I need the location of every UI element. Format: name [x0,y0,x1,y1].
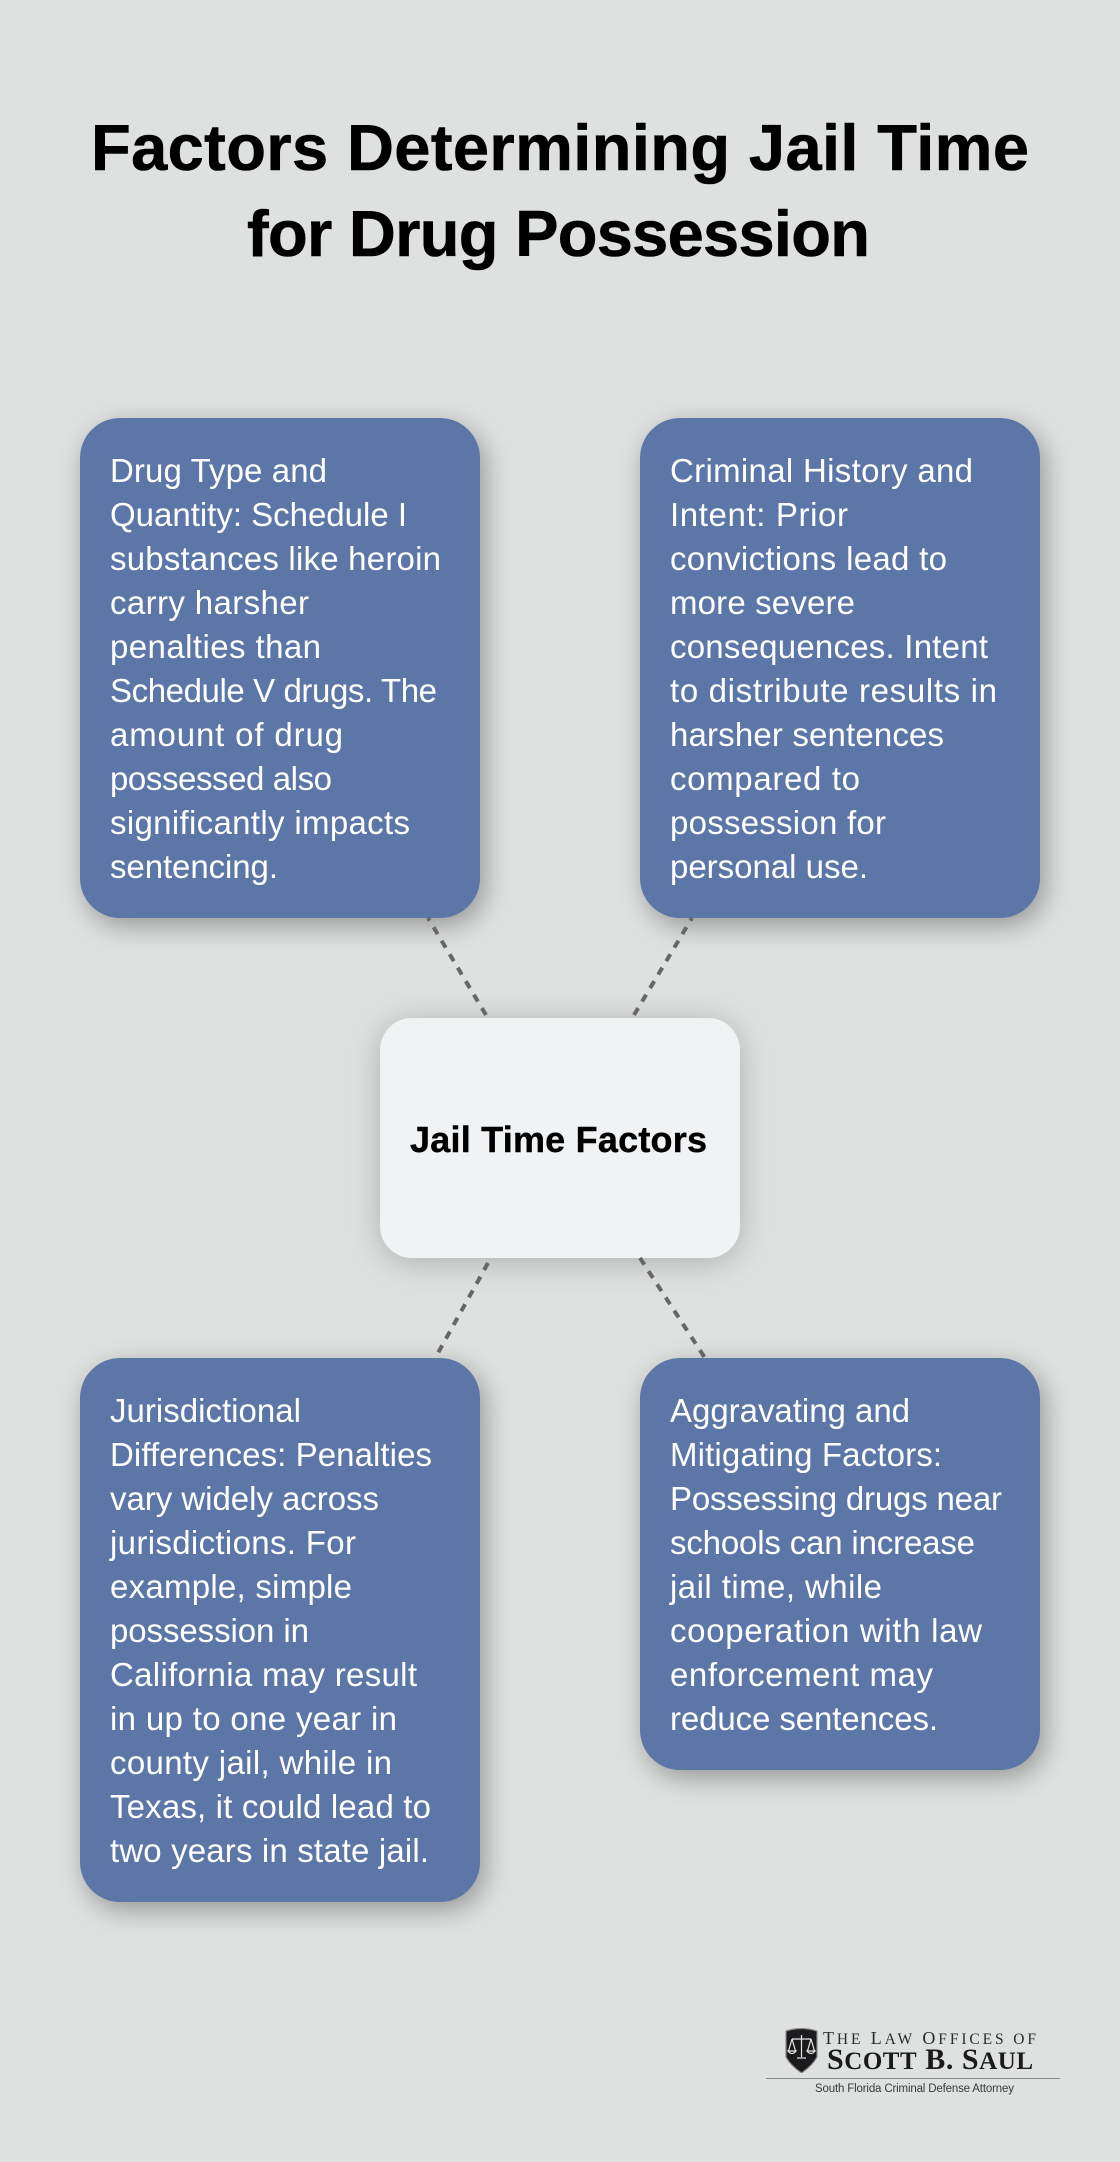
panel: jurisdictional differences: jurisdictions. For [109,1524,356,1561]
panel: criminal history and intent: personal use. [670,848,868,885]
panel: drug type and quantity: Quantity: Schedule I [110,496,407,533]
panel: criminal history and intent: to distribute results in [670,672,997,709]
panel: jurisdictional differences: California may result [110,1656,417,1693]
panel: aggravating and mitigating factors: reduce sentences. [670,1700,938,1737]
panel: jurisdictional differences: example, simple [110,1568,352,1605]
panel: aggravating and mitigating factors: Mitigating Factors: [670,1436,942,1473]
title: for Drug Possession [247,197,870,270]
panel: aggravating and mitigating factors: Possessing drugs near [670,1480,1002,1517]
panel: jail time factors center box [380,1018,740,1258]
panel: drug type and quantity: possessed also [110,760,332,797]
panel: jurisdictional differences: Texas, it could lead to [110,1788,431,1825]
panel: drug type and quantity: sentencing. [110,848,278,885]
panel: drug type and quantity: significantly impacts [110,804,410,841]
panel: jurisdictional differences [80,1358,480,1902]
panel: criminal history and intent: compared to [670,760,860,797]
panel: criminal history and intent: more severe [670,584,855,621]
panel: jurisdictional differences: Jurisdictional [110,1392,301,1429]
panel: criminal history and intent: consequences. Intent [670,628,988,665]
panel: drug type and quantity: Drug Type and [110,452,327,489]
logo wordmark: THE LAW OFFICES OF [823,2028,1036,2048]
logo wordmark [766,2028,1060,2095]
panel: drug type and quantity: substances like heroin [110,540,441,577]
panel: drug type and quantity: Schedule V drugs. The [110,672,437,709]
title: Factors Determining Jail Time [91,111,1029,184]
panel: criminal history and intent: harsher sentences [670,716,944,753]
connector arrows: dashed lines from center to cards [426,917,706,1358]
panel: aggravating and mitigating factors: jail time, while [669,1568,882,1605]
panel: criminal history and intent: convictions lead to [670,540,947,577]
panel: drug type and quantity: amount of drug [110,716,343,753]
panel: jurisdictional differences: two years in state jail. [110,1832,429,1869]
logo wordmark: SCOTT B. SAUL [827,2043,1033,2076]
icon: shield with scales [785,2028,818,2073]
panel: drug type and quantity [80,418,480,918]
panel: aggravating and mitigating factors: Aggravating and [670,1392,910,1429]
panel: jurisdictional differences: Differences: Penalties [110,1436,432,1473]
panel: criminal history and intent: Criminal History and [670,452,973,489]
panel: criminal history and intent [640,418,1040,918]
panel: jurisdictional differences: possession in [110,1612,309,1649]
panel: aggravating and mitigating factors: schools can increase [670,1524,975,1561]
panel: aggravating and mitigating factors [640,1358,1040,1770]
panel: criminal history and intent: possession for [670,804,886,841]
panel: criminal history and intent: Intent: Prior [670,496,848,533]
title [91,111,1029,270]
panel: drug type and quantity: carry harsher [110,584,309,621]
panel: aggravating and mitigating factors: enforcement may [670,1656,934,1693]
panel: drug type and quantity: penalties than [110,628,321,665]
logo: the law offices of scott b. saul [766,2028,1060,2095]
panel: jurisdictional differences: vary widely across [110,1480,379,1517]
panel: jurisdictional differences: county jail, while in [110,1744,392,1781]
panel: aggravating and mitigating factors: cooperation with law [670,1612,982,1649]
logo wordmark: South Florida Criminal Defense Attorney [815,2083,1014,2095]
panel: jail time factors center box: Jail Time Factors [410,1119,707,1160]
panel: jurisdictional differences: in up to one year in [110,1700,397,1737]
